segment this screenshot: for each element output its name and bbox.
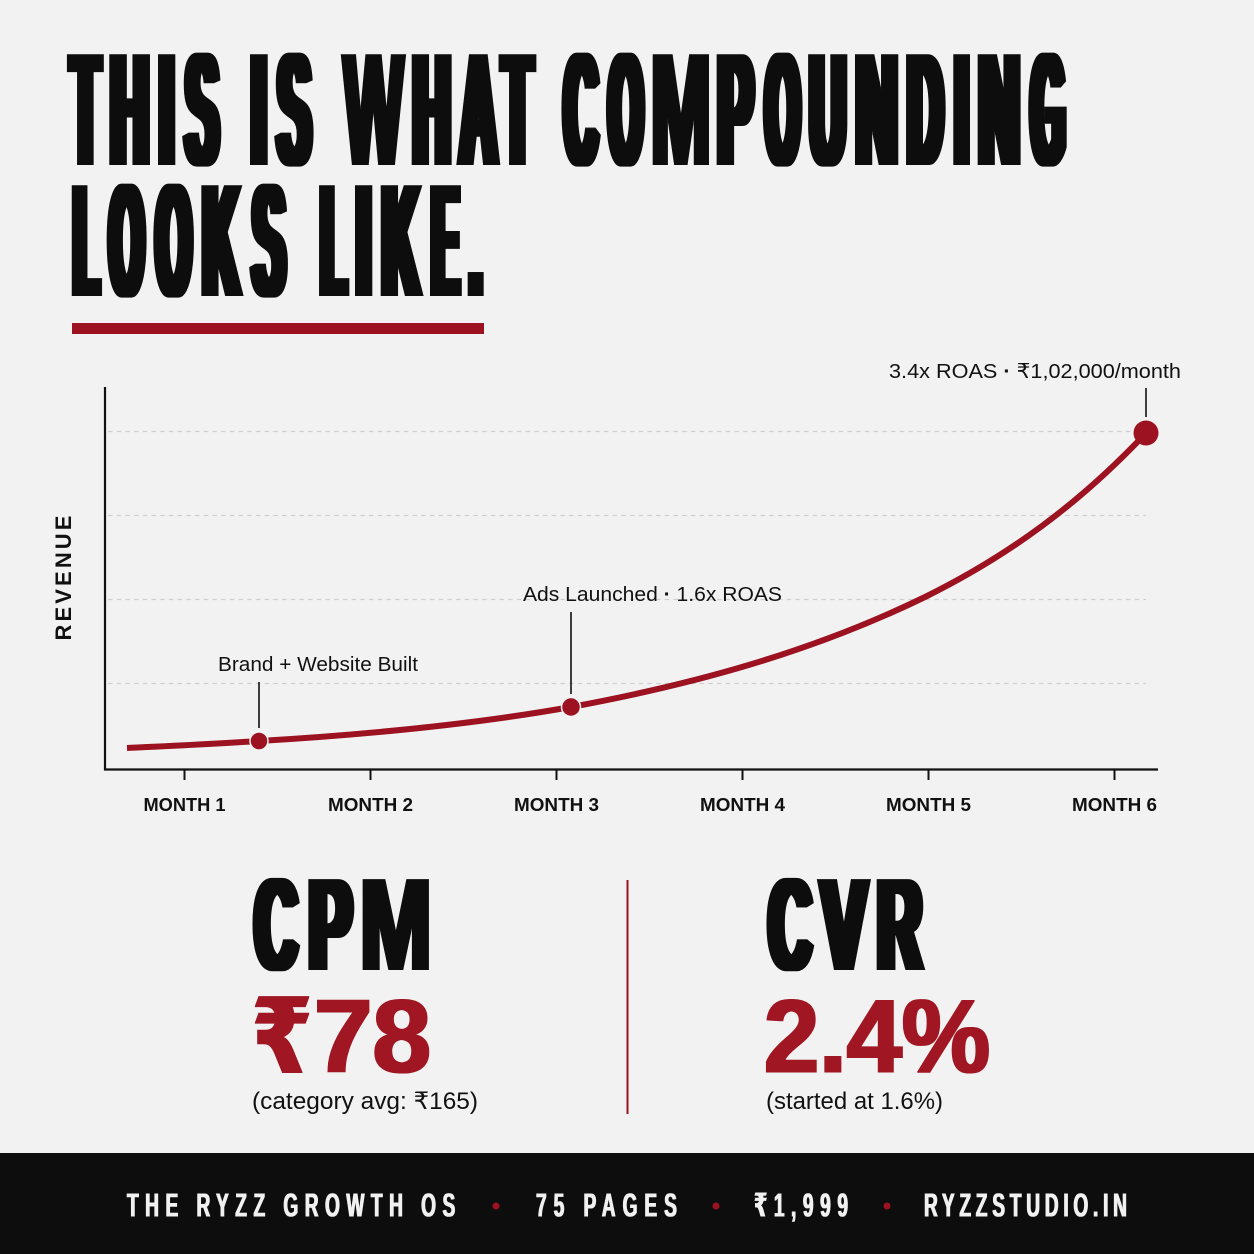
stat: CPM: 78: [314, 979, 431, 1095]
x-axis ticks and labels: [144, 770, 1157, 815]
title: O: [110, 151, 143, 331]
title: U: [810, 20, 845, 200]
title: L: [321, 151, 346, 331]
stat: CVR: 2.4%: [764, 979, 990, 1095]
title: A: [460, 20, 497, 200]
annotation: ads launched: Ads Launched · 1.6x ROAS: [523, 584, 782, 606]
title: H: [111, 20, 148, 200]
x-axis ticks and labels: MONTH 5: [886, 795, 971, 815]
title: O: [609, 20, 642, 200]
title: I: [357, 151, 371, 331]
annotation: brand and website built: Brand + Website Built: [218, 654, 418, 676]
stat: CPM: P: [309, 851, 352, 998]
annotation: brand and website built: [218, 654, 418, 750]
annotation: peak ROAS: 3.4x ROAS · ₹1,02,000/month: [889, 360, 1181, 383]
stat: CPM: M: [360, 851, 432, 998]
title: S: [253, 151, 285, 331]
title: S: [278, 20, 310, 200]
title: [71, 20, 1064, 331]
title: O: [156, 151, 191, 331]
title: T: [71, 20, 99, 200]
stat: CPM: C: [255, 851, 297, 998]
title: P: [718, 20, 753, 200]
revenue curve: [127, 433, 1146, 748]
x-axis ticks and labels: MONTH 4: [700, 795, 785, 815]
footer bar: [0, 1153, 1254, 1254]
footer bar: ₹1,999: [754, 1187, 848, 1224]
chart axes: [105, 387, 1158, 770]
stat: CVR: [764, 851, 990, 1115]
title: I: [955, 20, 968, 200]
annotation: peak ROAS: [889, 360, 1181, 446]
title: I: [160, 20, 174, 200]
y-axis label: REVENUE: [51, 516, 76, 640]
stat: CPM: ₹: [252, 976, 312, 1098]
text: G: [1032, 20, 1064, 200]
title underline: [72, 323, 484, 334]
title: T: [503, 20, 532, 200]
title: K: [203, 151, 239, 331]
stat: CVR: (started at 1.6%): [766, 1088, 943, 1115]
title: S: [186, 20, 218, 200]
title: O: [766, 20, 799, 200]
stat: CPM: (category avg: ₹165): [252, 1088, 478, 1115]
title: N: [979, 20, 1019, 200]
footer bar: 75 PAGES: [536, 1187, 677, 1224]
title: L: [74, 151, 98, 331]
annotation: ads launched: [523, 584, 782, 716]
title: C: [565, 20, 597, 200]
x-axis ticks and labels: MONTH 6: [1072, 795, 1157, 815]
title: N: [856, 20, 897, 200]
divider: [626, 880, 628, 1114]
stat: CPM: [252, 851, 478, 1115]
x-axis ticks and labels: MONTH 3: [514, 795, 599, 815]
title: I: [251, 20, 266, 200]
stat: CVR: V: [821, 851, 866, 998]
footer bar: RYZZSTUDIO.IN: [924, 1187, 1127, 1224]
title: K: [382, 151, 419, 331]
footer bar: THE RYZZ GROWTH OS: [127, 1187, 455, 1224]
title: D: [908, 20, 943, 200]
title: W: [344, 20, 403, 200]
title: M: [651, 20, 711, 200]
title: .: [470, 151, 482, 331]
title: H: [413, 20, 450, 200]
title: E: [432, 151, 458, 331]
x-axis ticks and labels: MONTH 2: [328, 795, 413, 815]
chart: revenue growth: [51, 360, 1181, 815]
stat: CVR: C: [769, 851, 811, 998]
x-axis ticks and labels: MONTH 1: [144, 795, 226, 815]
stat: CVR: R: [878, 851, 922, 998]
